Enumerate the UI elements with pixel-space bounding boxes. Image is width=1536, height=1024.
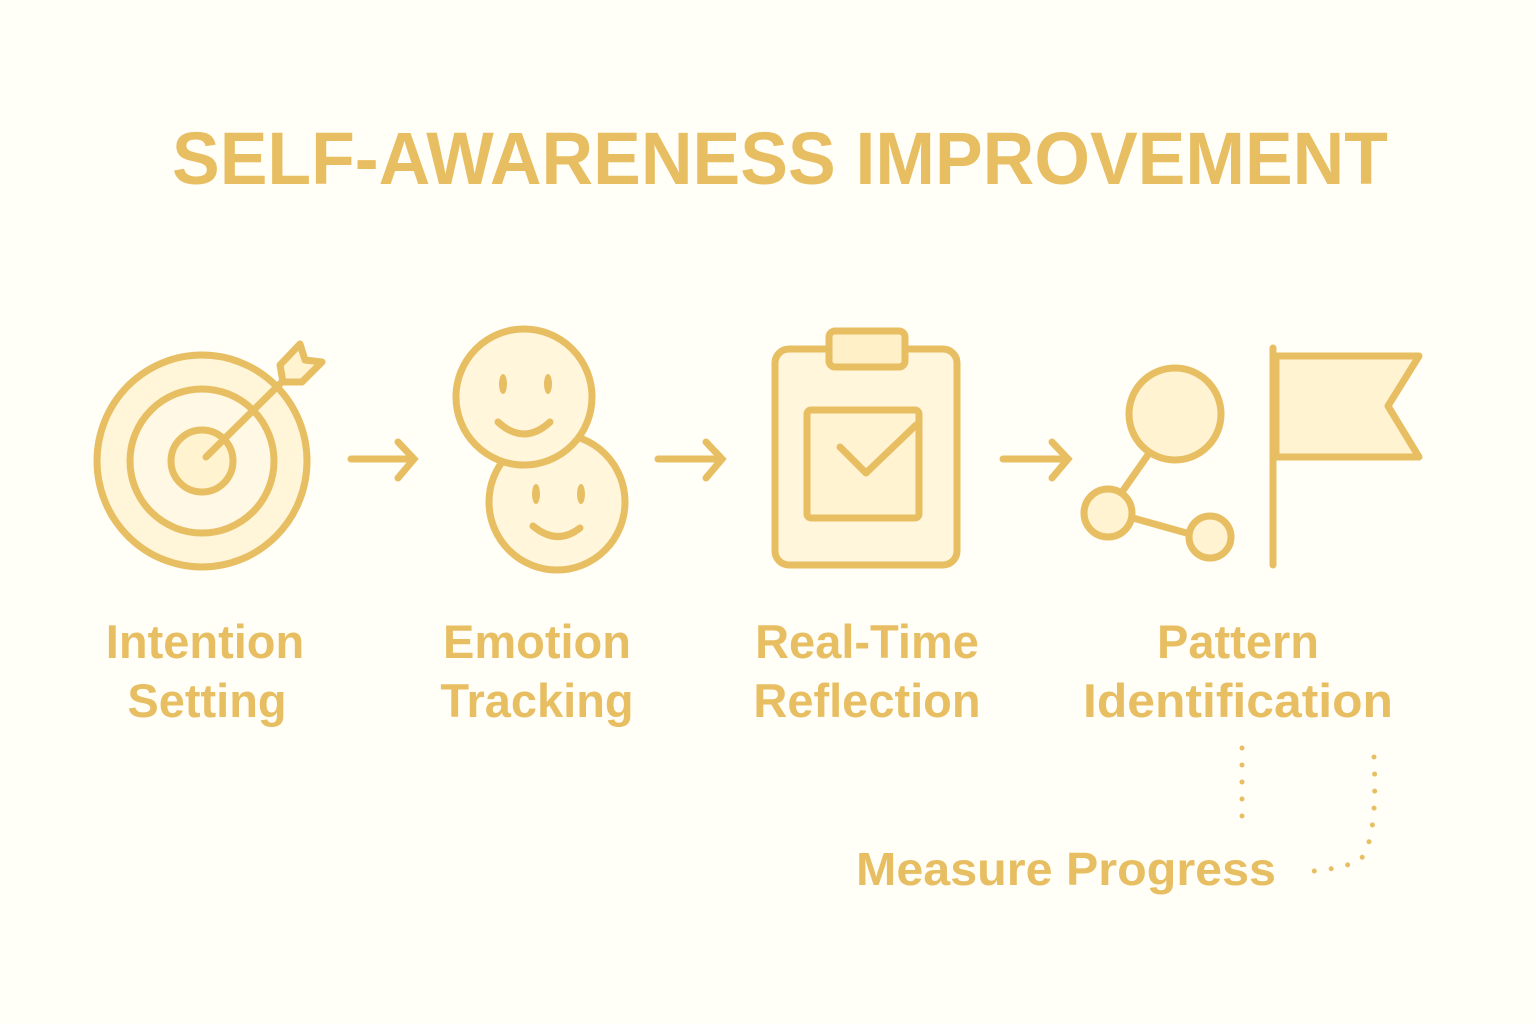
label: Real-Time Reflection: [753, 615, 981, 727]
label: Pattern Identification: [1083, 615, 1393, 727]
label: Intention Setting: Intention: [106, 615, 304, 668]
label: Emotion Tracking: Emotion: [443, 615, 631, 668]
label: Measure Progress: Measure Progress: [856, 843, 1276, 895]
label: Pattern Identification: Identification: [1083, 674, 1393, 727]
label: Real-Time Reflection: Reflection: [753, 674, 981, 727]
label: Intention Setting: [106, 615, 304, 727]
icon: clipboard with checkbox: [775, 331, 957, 565]
label: Pattern Identification: Pattern: [1157, 615, 1319, 668]
arrow 2: [658, 442, 722, 478]
label: Emotion Tracking: Tracking: [440, 674, 634, 727]
title: SELF-AWARENESS IMPROVEMENT: [172, 117, 1388, 200]
arrow 1: [351, 442, 414, 478]
dotted connector: [1242, 748, 1375, 872]
icon: nodes and flag: [1084, 348, 1419, 565]
label: Emotion Tracking: [440, 615, 634, 727]
label: Real-Time Reflection: Real-Time: [755, 615, 979, 668]
arrow 3: [1003, 442, 1068, 478]
icon: target with arrow: [97, 344, 322, 567]
label: Intention Setting: Setting: [127, 674, 287, 727]
icon: two smiley faces: [456, 329, 625, 570]
